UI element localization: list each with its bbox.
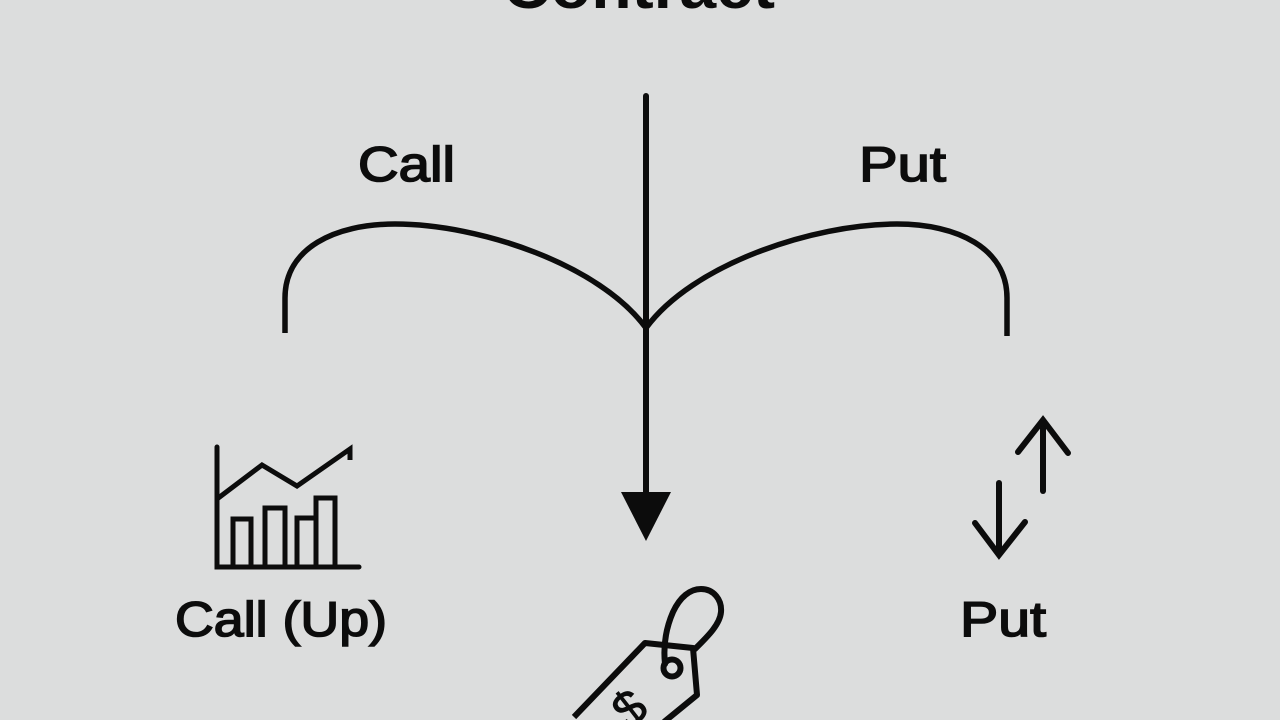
icon: price tag [574,589,721,720]
branch: left curve to call [285,224,646,333]
label: put: Put [960,593,1046,647]
label: call up: Call (Up) [175,593,387,647]
heading: call branch: Call [358,138,455,192]
icon: up and down arrows [975,420,1068,555]
icon: rising chart [217,447,359,567]
heading: put branch: Put [859,138,946,192]
arrow: central downward arrow [621,96,671,541]
branch: right curve to put [646,224,1007,336]
